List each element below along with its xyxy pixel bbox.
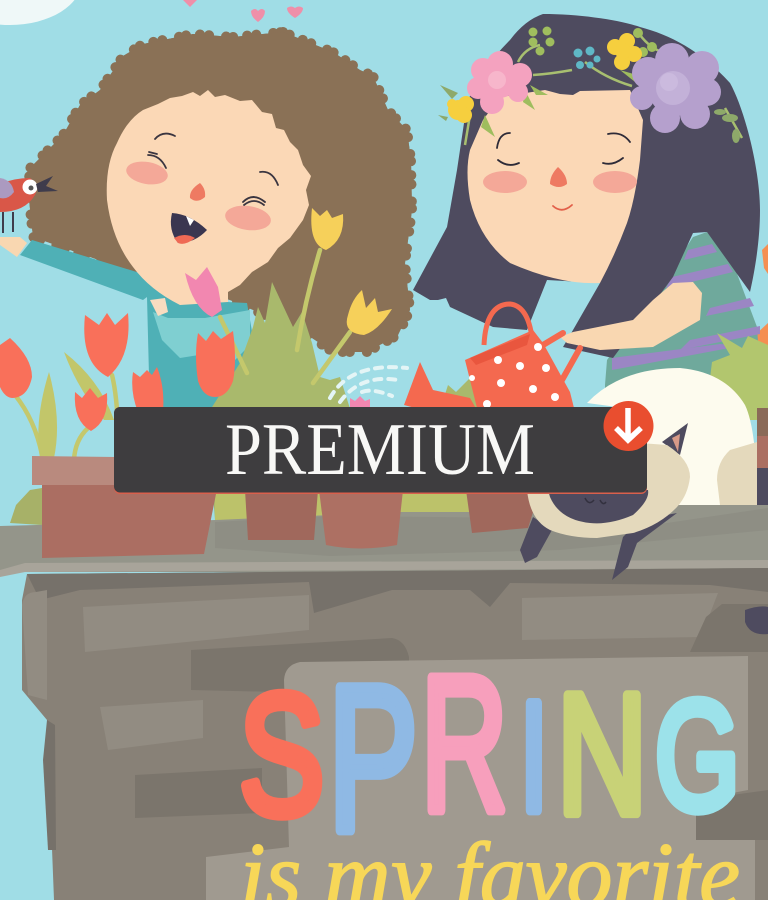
left stones	[22, 590, 47, 700]
wall top shadow	[27, 568, 768, 613]
water spray	[330, 367, 407, 402]
title: SPRING: P	[328, 644, 418, 875]
leaves	[481, 26, 657, 137]
title: SPRING: R	[421, 636, 508, 851]
tulips	[0, 313, 235, 431]
wall bricks	[83, 593, 718, 750]
leaves	[38, 352, 114, 458]
sage leaves	[438, 85, 740, 143]
cloud	[0, 0, 82, 25]
nose	[190, 183, 205, 201]
cat	[520, 368, 757, 580]
mouth	[171, 213, 207, 244]
purple flower	[630, 43, 721, 133]
premium label: PREMIUM	[225, 409, 535, 491]
blush	[593, 171, 637, 193]
pots on far right	[757, 408, 768, 505]
eyes and brows	[148, 134, 278, 205]
sign board	[206, 656, 755, 900]
flower crown	[438, 26, 742, 145]
title: SPRING	[239, 636, 740, 875]
right edge tulips	[755, 244, 768, 353]
shirt stripes	[612, 244, 760, 370]
shoulder skin	[150, 298, 168, 316]
girl with curly hair	[0, 32, 412, 415]
curly hair	[28, 32, 412, 352]
green grass bush	[207, 282, 352, 520]
watering can	[404, 304, 580, 412]
blush	[483, 171, 527, 193]
pink flower	[467, 51, 532, 114]
hair fill	[28, 32, 412, 352]
yellow flowers	[447, 33, 642, 123]
closed eyes and smile	[497, 133, 630, 210]
grass behind can	[440, 378, 480, 410]
plant on right	[708, 333, 768, 420]
title: SPRING: G	[655, 670, 740, 843]
body and sleeve	[20, 240, 253, 415]
nose	[550, 167, 567, 187]
pink tulip	[185, 267, 222, 317]
blush	[224, 203, 272, 233]
bird	[0, 176, 58, 233]
title: SPRING: S	[239, 660, 324, 851]
title: SPRING: I	[520, 670, 548, 843]
table edge	[0, 560, 768, 577]
hearts	[183, 0, 303, 22]
dark side stone	[43, 720, 56, 850]
pots	[32, 456, 540, 558]
hand	[0, 237, 27, 257]
table top	[0, 505, 768, 572]
flower stems and leaves	[15, 250, 350, 460]
face	[468, 90, 643, 283]
small pink bud	[350, 396, 370, 411]
blush	[124, 159, 170, 187]
icon: download arrow	[604, 401, 654, 451]
face	[107, 90, 311, 305]
shirt	[605, 232, 762, 400]
title: SPRING: N	[557, 658, 647, 850]
collar	[153, 310, 250, 360]
girl with flower crown	[413, 14, 762, 400]
premium badge	[114, 407, 647, 494]
yellow tulips	[311, 208, 392, 335]
green backdrop behind pots	[215, 490, 470, 525]
arm	[560, 282, 702, 350]
long dark hair	[413, 14, 760, 358]
small bush left	[10, 488, 42, 525]
stems	[465, 35, 742, 145]
stone wall	[22, 568, 768, 900]
